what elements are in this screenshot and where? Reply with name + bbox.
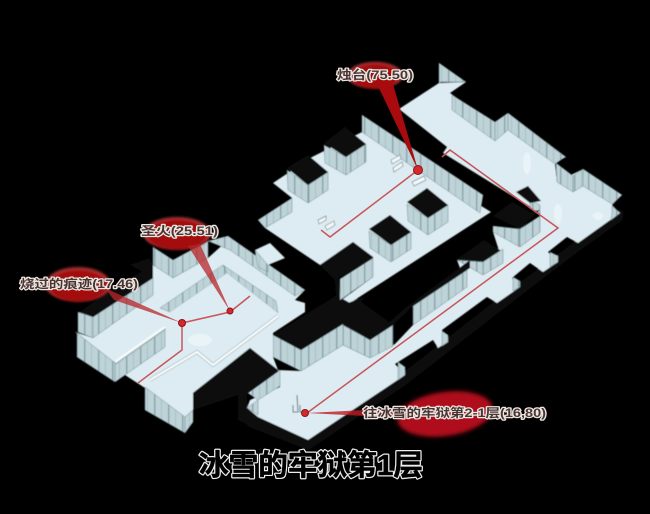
callout: sacred fire: 圣火(25.51) — [141, 224, 218, 238]
pavilion 3 — [407, 188, 448, 235]
callout: candle stand — [337, 61, 422, 174]
snow patches — [523, 152, 603, 224]
side alcove — [255, 243, 285, 272]
pavilion 2 — [324, 127, 366, 175]
east hall, corridor and south room — [246, 63, 622, 447]
route: east hall to south room — [307, 150, 558, 413]
staircase marker — [293, 395, 304, 412]
callout: to floor 2-1 — [302, 386, 546, 442]
candle benches — [318, 155, 426, 230]
pavilion 1 — [287, 155, 328, 203]
callout: sacred fire — [141, 216, 233, 314]
title: 冰雪的牢狱第1层 — [199, 449, 423, 482]
callout: candle stand: 烛台(75.50) — [337, 67, 413, 82]
callout: to floor 2-1: 往冰雪的牢狱第2-1层(16,80) — [363, 405, 546, 420]
raised floor edge — [115, 316, 278, 380]
route lines — [138, 150, 558, 413]
centre room with pavilions — [258, 115, 491, 320]
callout: burn marks — [20, 266, 186, 326]
title: 冰雪的牢狱第1层 — [199, 449, 423, 482]
callout: burn marks: 烧过的痕迹(17.46) — [20, 276, 138, 291]
west chamber — [75, 236, 305, 433]
snow patch — [188, 334, 212, 346]
pavilion 4 — [369, 215, 411, 262]
route: centre room — [321, 170, 418, 237]
route: west chamber — [138, 296, 250, 383]
map: ice prison floor plan — [75, 63, 622, 447]
